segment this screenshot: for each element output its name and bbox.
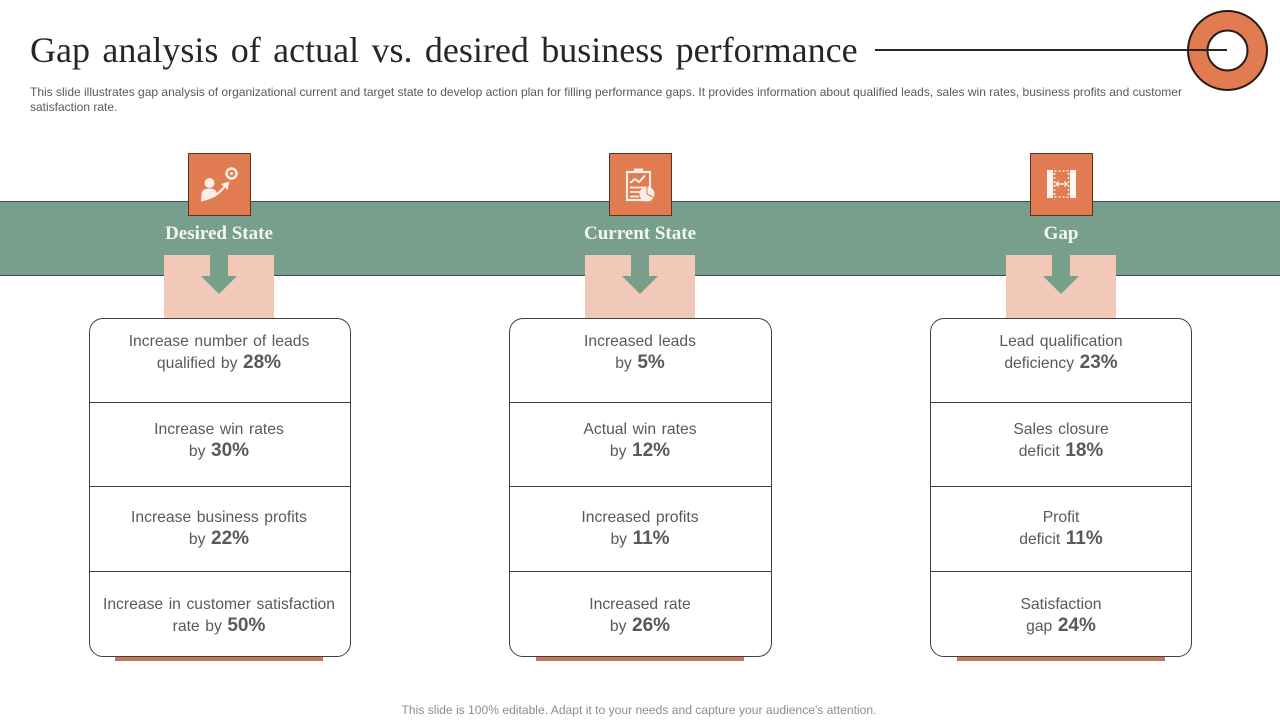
pink block	[585, 255, 695, 318]
card: gap values	[930, 318, 1192, 657]
gap: leads: Lead qualification	[999, 333, 1123, 350]
target: leads: Increase number of leads	[129, 333, 309, 350]
icon: person with target	[188, 153, 251, 216]
target: win rates: by 30%	[189, 440, 249, 461]
panel: current state	[509, 153, 772, 661]
icon: clipboard report	[609, 153, 672, 216]
card: desired state targets	[89, 318, 351, 657]
value: rate	[589, 596, 691, 636]
value: profits	[581, 509, 699, 549]
target: profits: by 22%	[189, 528, 249, 549]
gap: sales: Sales closure	[1013, 421, 1109, 438]
title: Gap analysis of actual vs. desired business performance	[30, 30, 858, 70]
value: profits: Increased profits	[581, 509, 699, 526]
value: rate: Increased rate	[589, 596, 691, 613]
arrow	[1043, 255, 1079, 294]
gap: sales	[1013, 421, 1109, 461]
target: satisfaction: Increase in customer satisfaction	[103, 596, 335, 613]
card: current state values	[509, 318, 772, 657]
target: profits: Increase business profits	[131, 509, 307, 526]
gap: profit	[1019, 509, 1103, 549]
gap: sales: deficit 18%	[1019, 440, 1103, 461]
card accent bar	[536, 657, 744, 661]
value: win rates: by 12%	[610, 440, 670, 461]
target: leads	[129, 333, 309, 373]
pink block	[164, 255, 274, 318]
footer note: This slide is 100% editable. Adapt it to your needs and capture your audience's attention.	[402, 703, 876, 717]
target: leads: qualified by 28%	[157, 352, 281, 373]
panel: gap	[930, 153, 1192, 661]
card accent bar	[957, 657, 1165, 661]
value: leads	[584, 333, 696, 373]
target: satisfaction	[103, 596, 335, 636]
target: satisfaction: rate by 50%	[173, 615, 265, 636]
value: win rates: Actual win rates	[583, 421, 697, 438]
heading: gap: Gap	[1044, 223, 1078, 244]
value: leads: by 5%	[615, 352, 665, 373]
value: leads: Increased leads	[584, 333, 696, 350]
heading: current state: Current State	[584, 223, 696, 244]
value: profits: by 11%	[610, 528, 670, 549]
title line and circle ornament	[875, 10, 1268, 91]
gap: satisfaction	[1020, 596, 1102, 636]
card accent bar	[115, 657, 323, 661]
arrow	[201, 255, 237, 294]
pink block	[1006, 255, 1116, 318]
value: win rates	[583, 421, 697, 461]
gap: satisfaction: gap 24%	[1026, 615, 1096, 636]
panel: desired state	[89, 153, 351, 661]
heading: desired state: Desired State	[165, 223, 273, 244]
gap: leads: deficiency 23%	[1004, 352, 1118, 373]
green band	[0, 201, 1280, 276]
gap: profit: deficit 11%	[1019, 528, 1103, 549]
target: win rates: Increase win rates	[154, 421, 284, 438]
target: profits	[131, 509, 307, 549]
gap: profit: Profit	[1043, 509, 1079, 526]
description text: This slide illustrates gap analysis of organizational current and target state to develop action plan for filling performance gaps. It provides information about qualified leads, sales win rates, business profits and customer satisfaction rate.	[30, 85, 1182, 114]
arrow	[622, 255, 658, 294]
value: rate: by 26%	[610, 615, 670, 636]
gap: leads	[999, 333, 1123, 373]
target: win rates	[154, 421, 284, 461]
gap: satisfaction: Satisfaction	[1020, 596, 1102, 613]
icon: gap between bars	[1030, 153, 1093, 216]
